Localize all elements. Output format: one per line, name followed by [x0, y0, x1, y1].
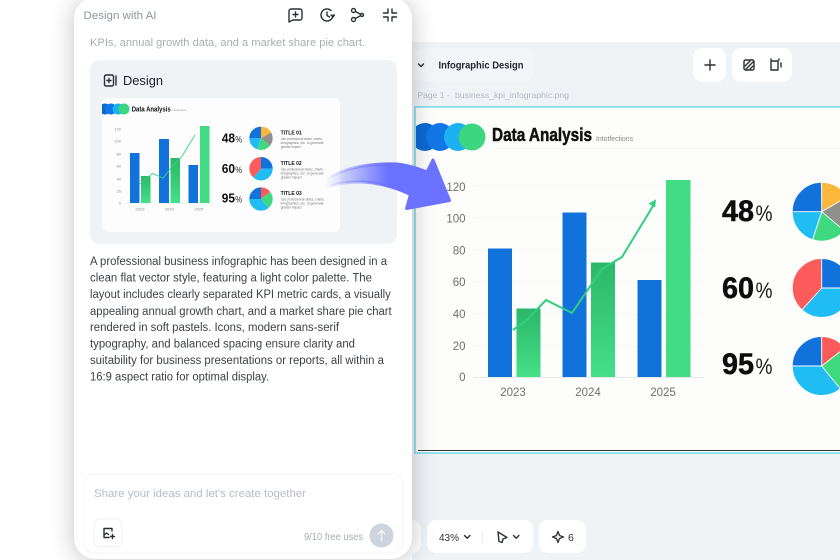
- thumbnail kpi 2: %: [235, 165, 242, 175]
- prompt text: KPIs, annual growth data, and a market share pie chart.: [90, 37, 365, 49]
- thumbnail infographic: Intotfections: [172, 109, 187, 112]
- kpi row 2: %: [756, 278, 772, 303]
- canvas background: [412, 42, 840, 560]
- zoom and pointer controls: 43%: [439, 532, 459, 544]
- tab: infographic design: [414, 48, 533, 81]
- kpi row 1: [722, 183, 840, 239]
- kpi row 1: %: [756, 201, 772, 226]
- trend arrow: [513, 200, 656, 330]
- thumbnail bar chart: 2025: [195, 206, 204, 212]
- thumbnail kpi 1: greater impact: [281, 145, 301, 149]
- pie chart 2: [802, 259, 840, 310]
- panel header title: Design with AI: [84, 10, 156, 22]
- header icon: collapse: [384, 9, 396, 21]
- x axis labels: 2024: [575, 387, 601, 399]
- thumbnail kpi 2: greater impact: [281, 176, 302, 180]
- thumbnail kpi 2: [222, 161, 324, 180]
- pie chart 1: [793, 183, 840, 239]
- thumbnail bar chart: 60: [117, 164, 122, 168]
- description paragraph: A professional business infographic has been designed in a: [90, 256, 388, 268]
- thumbnail bar chart: 2024: [165, 206, 175, 212]
- thumbnail kpi 1: Use professional slides, charts,: [281, 137, 323, 141]
- y axis labels: 100: [446, 214, 466, 226]
- thumbnail kpi 3: infographics, etc. to generate: [281, 202, 324, 206]
- usage counter: 9/10 free uses: [304, 532, 363, 543]
- bars: [488, 180, 690, 377]
- description paragraph: 16:9 aspect ratio for optimal display.: [90, 372, 269, 384]
- pie chart 3: [793, 337, 840, 388]
- thumbnail bar chart: 100: [114, 138, 122, 144]
- thumbnail kpi 1: 48: [222, 131, 235, 146]
- kpi value 60: 60: [722, 272, 754, 305]
- y axis labels: 20: [453, 341, 466, 353]
- bar chart: [446, 180, 704, 399]
- y axis labels: 60: [453, 277, 466, 289]
- design heading: Design: [123, 73, 163, 88]
- thumbnail bar chart: 120: [114, 126, 122, 132]
- infographic subtitle: Intotfections: [596, 136, 633, 143]
- canvas bottom toolbar: [400, 520, 586, 553]
- page label: business_kpi_infographic.png: [455, 90, 569, 100]
- description paragraph: typography, and balanced spacing ensure clarity and: [90, 339, 355, 351]
- x axis labels: [500, 387, 676, 399]
- thumbnail bar chart: [114, 126, 215, 212]
- thumbnail bar chart: 0: [119, 200, 122, 206]
- description paragraph: appealing annual growth chart, and a market share pie chart: [90, 306, 392, 318]
- thumbnail kpi 1: [222, 131, 324, 149]
- thumbnail kpi 2: infographics, etc. to generate: [281, 172, 324, 176]
- tab: infographic design: Infographic Design: [438, 60, 524, 72]
- thumbnail kpi 1: TITLE 01: [281, 131, 302, 137]
- thumbnail kpi 3: 95: [222, 191, 235, 206]
- chat panel: [74, 0, 412, 559]
- thumbnail kpi 3: TITLE 03: [281, 191, 302, 197]
- design icon: [104, 75, 116, 86]
- y axis labels: [446, 182, 466, 384]
- design card: [90, 60, 397, 244]
- thumbnail kpi 3: Use professional slides, charts,: [281, 198, 325, 202]
- thumbnail kpi 2: 60: [222, 161, 235, 176]
- button group: image tools: [732, 48, 792, 82]
- kpi row 3: %: [756, 354, 772, 379]
- send button: [370, 524, 394, 548]
- chat input box: [84, 474, 403, 553]
- main infographic canvas: [411, 107, 840, 453]
- description paragraph: clean flat vector style, featuring a light color palette. The: [90, 273, 372, 285]
- thumbnail bar chart: 2023: [136, 206, 145, 212]
- thumbnail logo: [100, 104, 130, 114]
- thumbnail kpi 3: %: [235, 195, 242, 205]
- thumbnail kpi 1: infographics, etc. to generate: [281, 141, 324, 145]
- x axis labels: 2023: [500, 387, 526, 399]
- header icon: new chat: [289, 9, 302, 22]
- page label: Page 1 -: [418, 90, 450, 100]
- input placeholder: Share your ideas and let's create together: [94, 488, 306, 500]
- thumbnail title: Data Analysis: [132, 106, 171, 114]
- description paragraph: rendered in soft pastels. Icons, modern sans-serif: [90, 322, 340, 334]
- credit count: [539, 520, 586, 553]
- header icon: history: [321, 9, 334, 21]
- thumbnail kpi 2: Use professional slides, charts,: [281, 168, 324, 172]
- image upload button: [94, 519, 122, 546]
- thumbnail kpi 3: greater impact: [281, 206, 302, 210]
- y axis labels: 120: [446, 182, 466, 194]
- description paragraph: layout includes clearly separated KPI metric cards, a visually: [90, 289, 391, 301]
- thumbnail kpi 2: TITLE 02: [281, 161, 302, 167]
- kpi row 3: [722, 337, 840, 388]
- thumbnail infographic: [100, 98, 340, 232]
- y axis labels: 0: [459, 372, 466, 384]
- transition arrow: [327, 160, 450, 208]
- kpi value 95: 95: [722, 348, 754, 381]
- header icon: share: [352, 8, 364, 22]
- credit count: 6: [568, 532, 574, 544]
- thumbnail bar chart: 20: [117, 188, 122, 194]
- x axis labels: 2025: [650, 387, 676, 399]
- thumbnail bar chart: 80: [117, 152, 122, 156]
- description paragraph: [90, 256, 392, 384]
- y axis labels: 80: [453, 246, 466, 258]
- thumbnail kpi 3: [222, 191, 325, 210]
- logo circles: [411, 123, 486, 151]
- canvas top toolbar: [414, 48, 792, 82]
- infographic title: Data Analysis: [492, 125, 592, 145]
- description paragraph: suitability for business presentations or reports, all within a: [90, 355, 385, 367]
- thumbnail kpi 1: %: [235, 135, 242, 145]
- zoom and pointer controls: [427, 520, 533, 553]
- button: add: [693, 48, 726, 82]
- y axis labels: 40: [453, 309, 466, 321]
- thumbnail bar chart: 40: [117, 176, 122, 182]
- kpi value 48: 48: [722, 195, 754, 228]
- kpi row 2: [722, 259, 840, 310]
